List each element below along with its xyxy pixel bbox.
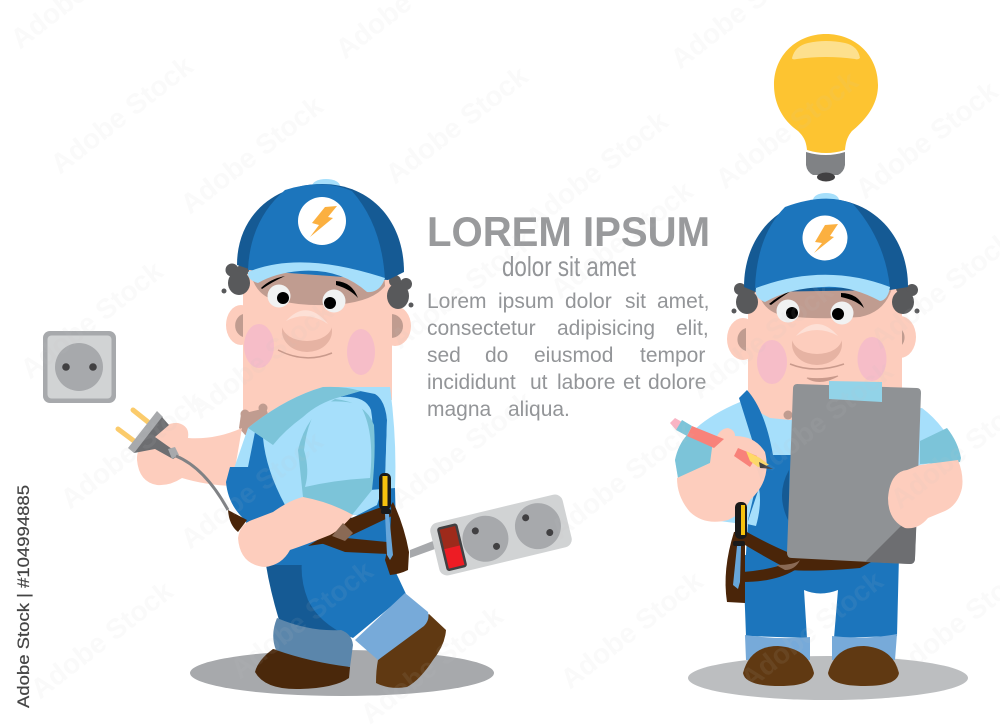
watermark: Adobe Stock	[555, 565, 709, 695]
body paragraph: ut	[530, 371, 548, 394]
head right worker	[748, 280, 902, 420]
back shoe	[255, 649, 350, 689]
left electrician with plug	[118, 179, 573, 696]
watermark: Adobe Stock	[15, 255, 169, 385]
watermark: Adobe Stock	[55, 385, 209, 515]
cap button right	[813, 193, 839, 207]
shirt right worker	[675, 402, 960, 530]
body paragraph: et	[623, 371, 641, 394]
eyebrows right worker	[769, 291, 864, 308]
extension cord lead	[410, 541, 435, 558]
collar	[248, 387, 361, 445]
body paragraph: elit,	[676, 317, 709, 340]
belt overlap on arm	[332, 523, 353, 541]
shirt sliver	[747, 488, 760, 526]
shirt strip right	[378, 387, 395, 488]
body paragraph: do	[485, 344, 508, 367]
watermark: Adobe Stock	[385, 385, 539, 515]
head details left	[244, 276, 375, 375]
watermark: Adobe Stock	[685, 275, 839, 405]
title: LOREM IPSUM	[427, 208, 710, 255]
eye left	[268, 284, 290, 308]
watermark: Adobe Stock	[175, 425, 329, 555]
mouth right worker	[790, 364, 844, 369]
pencil	[670, 418, 773, 469]
body paragraph: sed	[427, 344, 461, 367]
cap button	[312, 179, 340, 193]
body paragraph: incididunt	[427, 371, 516, 394]
body paragraph: eiusmod	[534, 344, 613, 367]
watermark: Adobe Stock	[380, 60, 534, 190]
body paragraph: adipisicing	[557, 317, 655, 340]
ears right worker	[727, 316, 916, 360]
watermark: Adobe Stock	[185, 295, 339, 425]
body paragraph: sit	[625, 290, 646, 313]
tool belt	[228, 502, 409, 575]
body paragraph: Lorem	[427, 290, 487, 313]
watermark: Adobe Stock	[735, 565, 889, 695]
watermark: Adobe Stock	[225, 555, 379, 685]
watermark: Adobe Stock	[385, 225, 539, 355]
smile	[278, 350, 332, 358]
subtitle: dolor sit amet	[502, 251, 636, 282]
bib	[739, 390, 800, 570]
bib shadow	[782, 470, 789, 522]
sleeve cuff right	[920, 428, 961, 464]
body paragraph: magna	[427, 398, 492, 421]
watermark: Adobe Stock	[175, 90, 329, 220]
power cord	[176, 456, 228, 510]
cap visor right	[756, 275, 890, 302]
front cuff	[355, 593, 428, 660]
watermark: Adobe Stock	[850, 75, 1000, 205]
eyes right worker	[776, 300, 800, 322]
ears left worker	[226, 305, 411, 346]
back leg	[266, 565, 345, 632]
nose	[282, 310, 332, 352]
belt overlap on clipboard	[776, 560, 800, 570]
cuffs right worker	[745, 634, 897, 660]
power strip	[429, 493, 573, 577]
body paragraph: ipsum	[498, 290, 554, 313]
chest hair	[239, 404, 270, 436]
watermark: Adobe Stock	[45, 50, 199, 180]
overalls upper	[226, 391, 396, 575]
front arm	[238, 497, 353, 567]
icon: wall socket	[43, 331, 116, 403]
cap visor	[248, 262, 385, 292]
clipboard	[787, 381, 921, 564]
cheek left	[244, 324, 274, 368]
body paragraph: consectetur	[427, 317, 536, 340]
eye right	[322, 290, 346, 312]
body paragraph: dolore	[648, 371, 706, 394]
hair tufts	[222, 264, 414, 309]
sleeve fold	[298, 399, 375, 515]
rear arm and hand	[137, 423, 242, 486]
right hand	[888, 460, 962, 528]
forehead shade	[252, 262, 385, 305]
sleeve cuff left	[675, 435, 715, 478]
ground shadow left	[190, 650, 494, 696]
watermark: Adobe Stock	[745, 355, 899, 485]
shirt base	[230, 387, 394, 515]
hair tufts right worker	[732, 282, 920, 314]
forehead shade right	[758, 270, 892, 318]
body paragraph: labore	[557, 371, 615, 394]
front leg	[302, 560, 406, 638]
tool belt right	[726, 530, 875, 603]
cap badge	[298, 197, 346, 245]
watermark: Adobe Stock	[545, 415, 699, 545]
back cuff	[273, 618, 353, 667]
body paragraph: amet,	[657, 290, 710, 313]
icon: plug	[118, 410, 179, 459]
screwdriver right	[733, 502, 747, 589]
watermark: Adobe Stock	[710, 65, 864, 195]
body paragraph: aliqua.	[508, 398, 570, 421]
neck spot	[784, 410, 792, 420]
left arm and hand	[677, 428, 767, 522]
nose right worker	[792, 323, 842, 365]
screwdriver left	[379, 473, 393, 560]
icon: light bulb	[774, 34, 878, 182]
stock image id: Adobe Stock | #104994885	[14, 485, 33, 708]
cheeks right worker	[757, 340, 787, 384]
right electrician with clipboard	[670, 193, 968, 700]
head left worker	[243, 262, 392, 425]
body paragraph: dolor	[565, 290, 612, 313]
watermark: Adobe Stock	[25, 575, 179, 705]
front shoe	[376, 614, 446, 688]
cap badge right	[802, 216, 848, 260]
cap dome right	[744, 199, 908, 292]
trousers	[743, 555, 899, 638]
cap dome	[237, 184, 404, 280]
sleeve highlight	[304, 401, 371, 487]
cheek right	[347, 329, 375, 375]
eyebrows	[261, 276, 358, 298]
head details right	[757, 291, 886, 384]
ground shadow right	[688, 656, 968, 700]
watermark: Adobe Stock	[520, 105, 674, 235]
watermark: Adobe Stock	[545, 175, 699, 305]
body paragraph: tempor	[640, 344, 705, 367]
shoes right worker	[743, 646, 899, 686]
